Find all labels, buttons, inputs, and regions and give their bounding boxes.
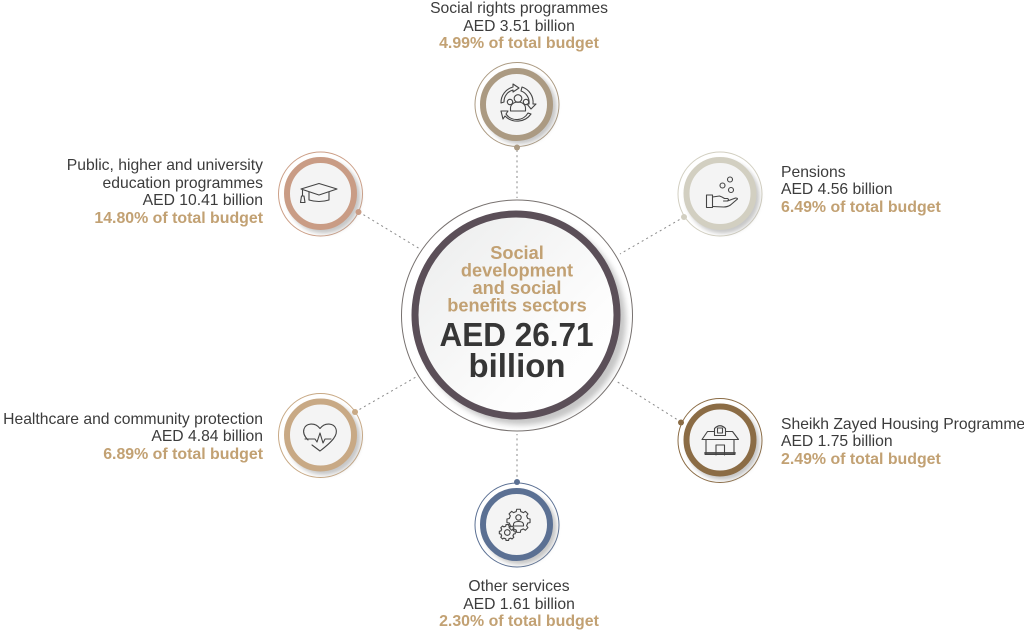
- icon: people cycle: [501, 84, 536, 121]
- text: healthcare: AED 4.84 billion: [151, 428, 263, 445]
- connector lines: [355, 150, 684, 482]
- node: housing: [678, 398, 762, 482]
- text: pensions: [781, 164, 942, 216]
- text: pensions: AED 4.56 billion: [781, 181, 893, 198]
- icon: graduation cap: [300, 184, 337, 202]
- node: social rights programmes: [475, 62, 559, 150]
- text: housing: AED 1.75 billion: [781, 433, 893, 450]
- text: social rights programmes: AED 3.51 billion: [463, 18, 575, 35]
- central total: AED 26.71: [440, 317, 594, 354]
- text: housing: 2.49% of total budget: [781, 451, 942, 468]
- text: other services: 2.30% of total budget: [439, 613, 600, 630]
- icon: hand with coins: [706, 177, 738, 208]
- central heading: benefits sectors: [447, 296, 587, 316]
- central heading: [447, 243, 587, 316]
- central heading: and social: [473, 278, 561, 298]
- text: pensions: Pensions: [781, 164, 846, 181]
- icon: heartbeat: [304, 424, 336, 451]
- text: education: Public, higher and university: [67, 157, 263, 174]
- text: social rights programmes: 4.99% of total budget: [439, 35, 600, 52]
- central circle: [402, 200, 632, 431]
- text: housing: [781, 416, 1024, 468]
- text: education: [67, 157, 264, 227]
- text: other services: [439, 578, 600, 630]
- node: education: [278, 152, 362, 236]
- text: other services: Other services: [468, 578, 570, 595]
- text: housing: Sheikh Zayed Housing Programme: [781, 416, 1024, 433]
- central total: [440, 317, 594, 385]
- text: other services: AED 1.61 billion: [463, 596, 575, 613]
- central total: billion: [468, 348, 566, 385]
- text: healthcare: 6.89% of total budget: [103, 446, 264, 463]
- central heading: Social: [490, 243, 544, 263]
- icon: house: [702, 426, 738, 455]
- text: social rights programmes: Social rights programmes: [430, 0, 608, 17]
- text: healthcare: [3, 411, 264, 463]
- node: healthcare: [278, 394, 362, 478]
- node: other services: [475, 479, 559, 567]
- node: pensions: [678, 152, 762, 236]
- text: social rights programmes: [430, 0, 608, 52]
- text: education: AED 10.41 billion: [143, 192, 263, 209]
- text: healthcare: Healthcare and community protection: [3, 411, 263, 428]
- text: education: education programmes: [103, 175, 263, 192]
- text: education: 14.80% of total budget: [94, 210, 264, 227]
- icon: gears with person: [499, 509, 530, 540]
- text: pensions: 6.49% of total budget: [781, 199, 942, 216]
- central heading: development: [461, 260, 573, 280]
